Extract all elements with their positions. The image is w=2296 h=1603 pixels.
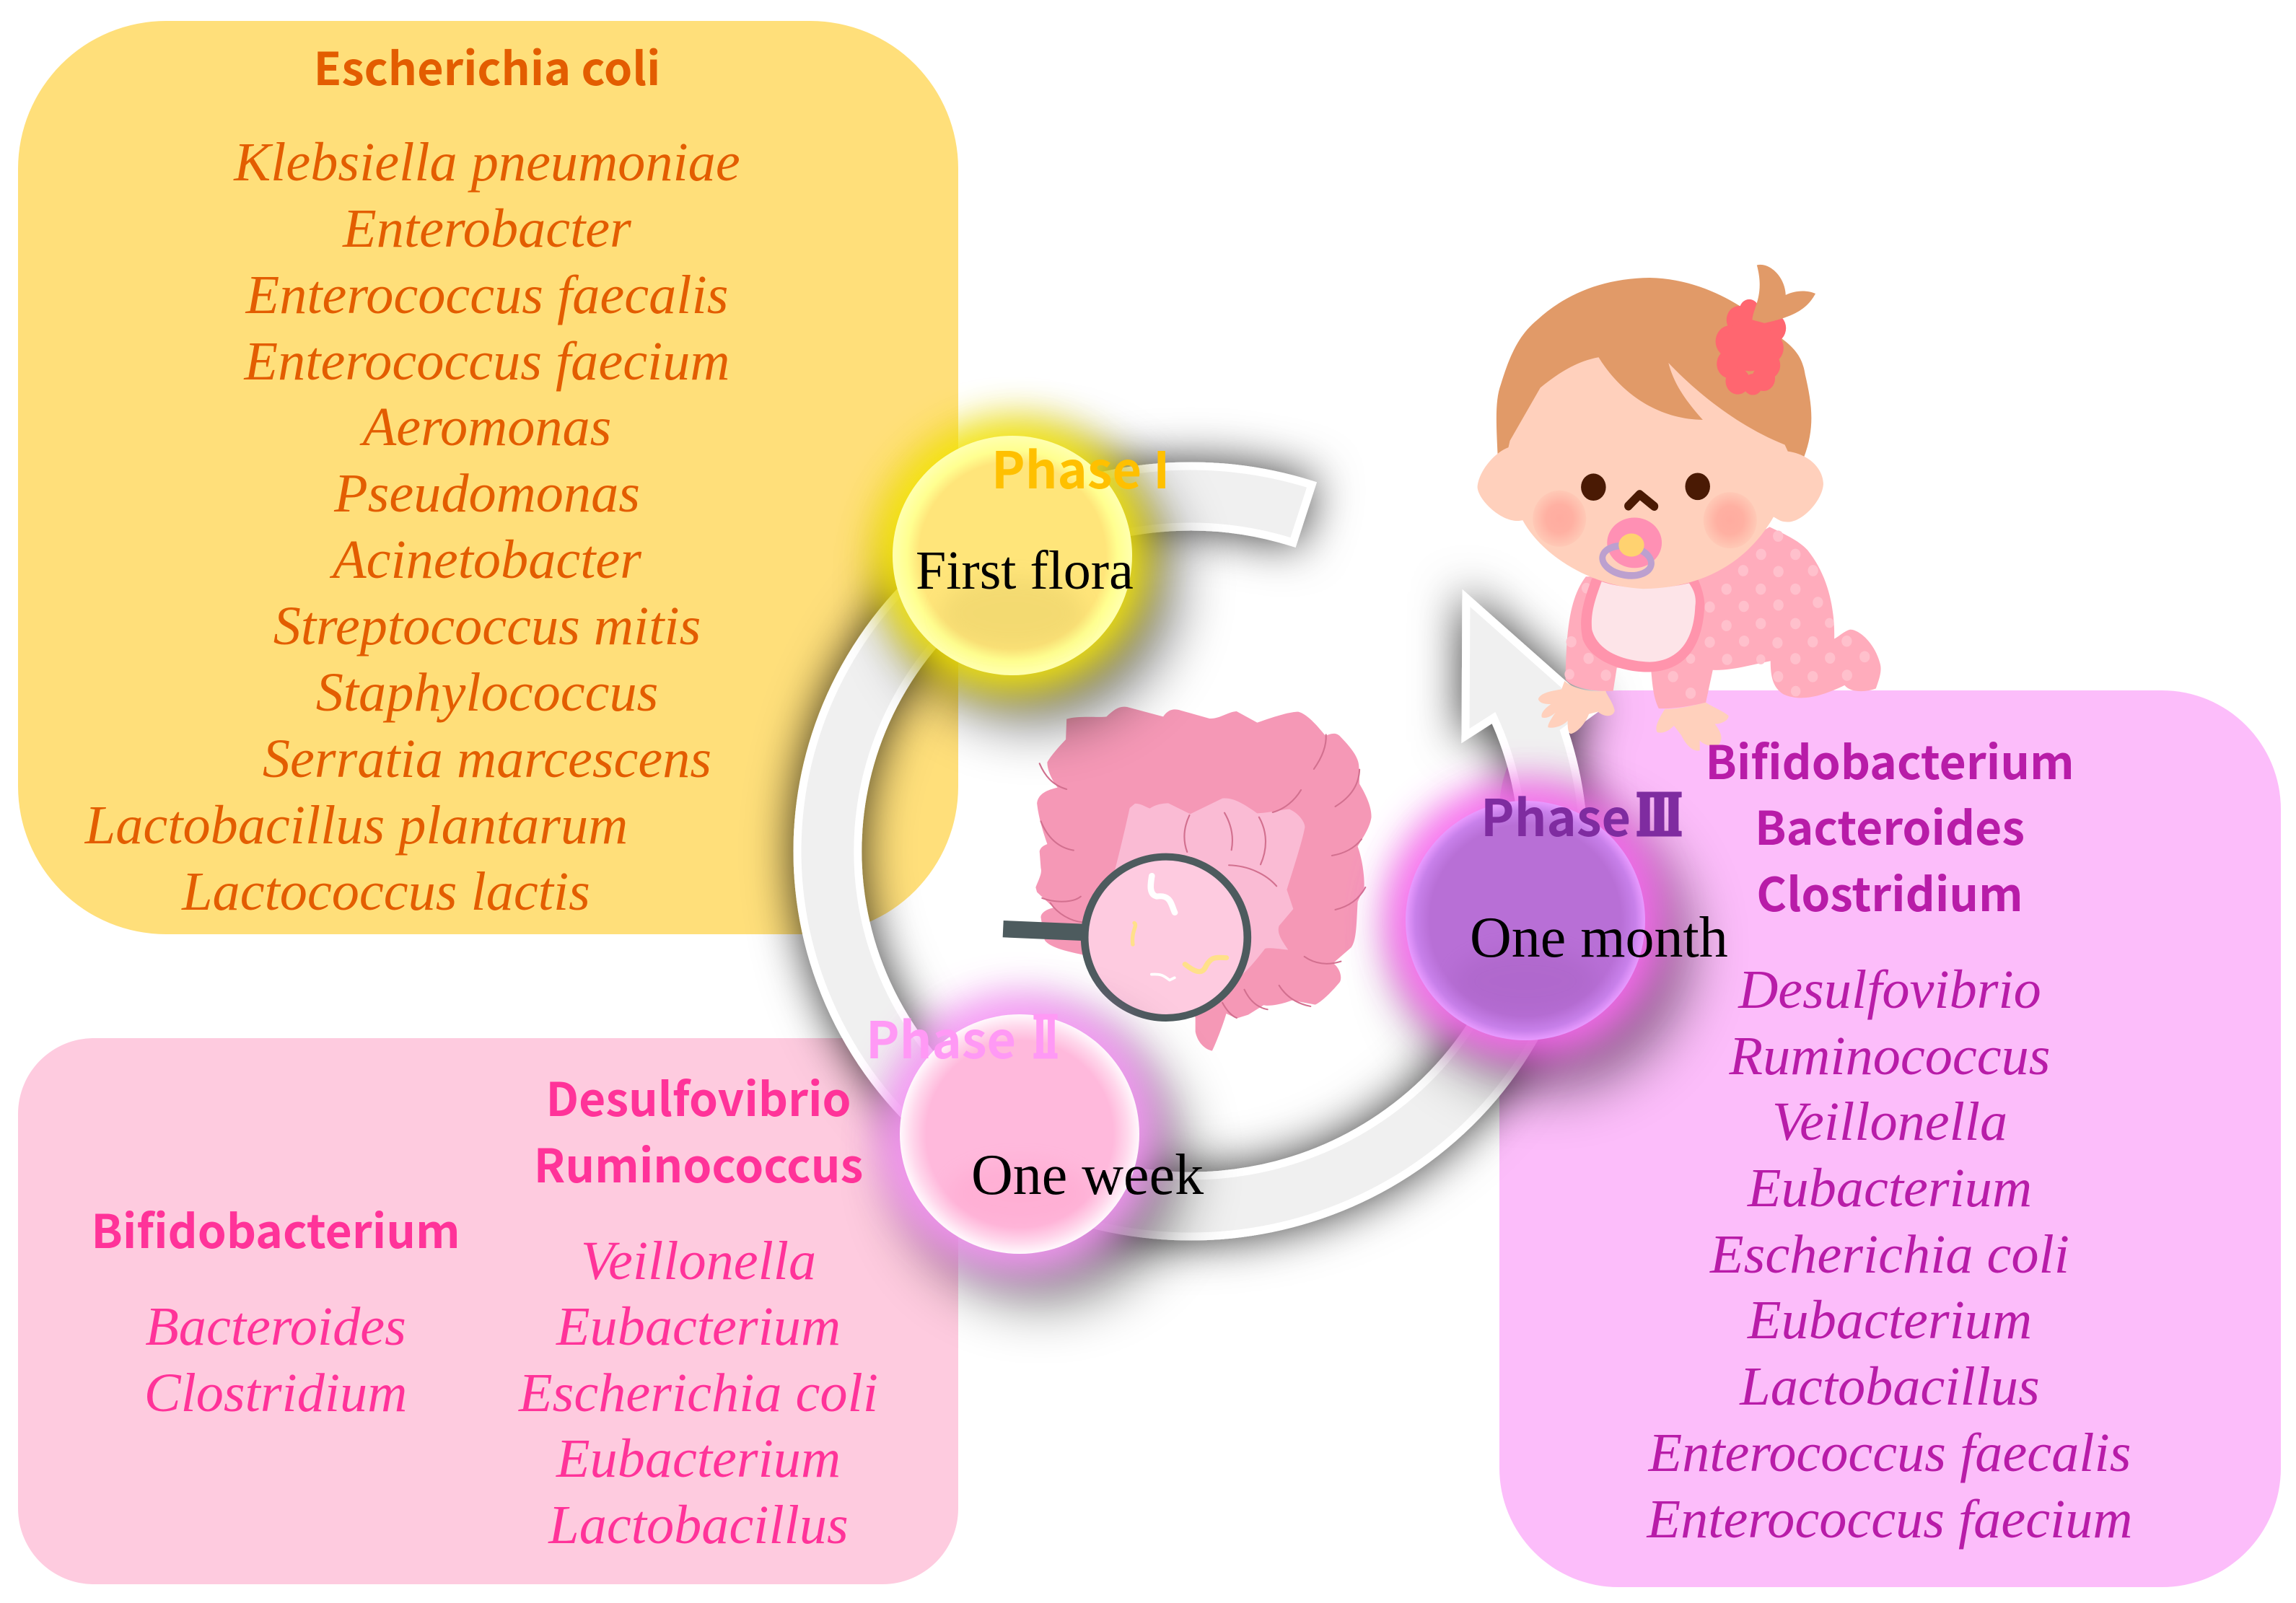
- text: magenta panel flora list: Enterococcus faecium: [1647, 1488, 2133, 1550]
- label: One month: One month: [1470, 906, 1728, 970]
- text: pink panel right flora list: Veillonella: [581, 1230, 816, 1291]
- label: Phase II: Ⅱ: [1030, 994, 1061, 1073]
- label: Phase I: Phase I: [991, 431, 1170, 504]
- text: yellow panel flora list: Enterococcus faecium: [244, 330, 730, 392]
- label: Phase III: [1481, 772, 1681, 851]
- circle: Phase I: [874, 417, 1175, 724]
- text: yellow panel flora list: Klebsiella pneumoniae: [233, 131, 740, 193]
- text: pink panel left flora list: Bacteroides: [145, 1296, 406, 1357]
- text: pink panel right flora list: Eubacterium: [556, 1296, 841, 1357]
- panel: yellow first flora background: [18, 21, 958, 934]
- text: pink panel right flora list: Eubacterium: [556, 1428, 841, 1489]
- text: pink panel left flora list: [91, 1195, 460, 1423]
- text: pink panel left flora list: Bifidobacterium: [91, 1195, 460, 1262]
- text: magenta panel flora list: Eubacterium: [1747, 1289, 2032, 1351]
- label: Phase III: Ⅲ: [1637, 772, 1681, 851]
- text: pink panel right flora list: Lactobacillus: [548, 1494, 849, 1555]
- label: Phase II: Phase: [866, 1001, 1016, 1073]
- panel: magenta one month background: [1499, 690, 2281, 1587]
- text: magenta panel flora list: Clostridium: [1756, 858, 2023, 925]
- text: yellow panel flora list: Enterobacter: [342, 198, 631, 259]
- text: pink panel right flora list: Escherichia coli: [518, 1362, 878, 1423]
- text: yellow panel flora list: Lactococcus lactis: [181, 861, 590, 922]
- text: magenta panel flora list: Bacteroides: [1755, 792, 2025, 858]
- text: yellow panel flora list: Pseudomonas: [333, 462, 640, 524]
- illustration: crawling baby: [1478, 265, 1881, 751]
- text: magenta panel flora list: Enterococcus faecalis: [1648, 1422, 2131, 1483]
- text: yellow panel flora list: Escherichia coli: [314, 33, 660, 99]
- text: yellow panel flora list: Serratia marcescens: [263, 728, 711, 789]
- text: yellow panel flora list: Enterococcus faecalis: [245, 264, 728, 325]
- text: magenta panel flora list: Desulfovibrio: [1738, 959, 2041, 1020]
- cycle arrow: [797, 466, 1593, 1237]
- text: pink panel right flora list: [518, 1063, 878, 1555]
- text: magenta panel flora list: [1647, 726, 2133, 1550]
- text: magenta panel flora list: Lactobacillus: [1739, 1356, 2040, 1417]
- panel: pink one week background: [18, 1038, 958, 1584]
- label: First flora: First flora: [916, 540, 1134, 601]
- text: yellow panel flora list: Streptococcus mitis: [273, 595, 701, 656]
- text: pink panel left flora list: Clostridium: [144, 1362, 407, 1423]
- label: Phase III: Phase: [1481, 778, 1631, 851]
- icon: intestine with magnifying glass: [1003, 707, 1372, 1051]
- text: magenta panel flora list: Ruminococcus: [1729, 1025, 2050, 1086]
- label: One week: One week: [971, 1143, 1204, 1207]
- circle: Phase III: [1384, 779, 1688, 1089]
- circle: Phase II: [878, 993, 1182, 1302]
- text: pink panel right flora list: Ruminococcus: [534, 1130, 863, 1196]
- text: magenta panel flora list: Bifidobacterium: [1705, 726, 2074, 793]
- text: yellow panel flora list: [84, 33, 740, 922]
- text: yellow panel flora list: Lactobacillus plantarum: [84, 794, 628, 856]
- text: yellow panel flora list: Aeromonas: [359, 396, 611, 457]
- text: magenta panel flora list: Eubacterium: [1747, 1157, 2032, 1218]
- text: yellow panel flora list: Staphylococcus: [316, 662, 658, 723]
- text: yellow panel flora list: Acinetobacter: [329, 529, 641, 590]
- text: magenta panel flora list: Veillonella: [1772, 1091, 2007, 1152]
- text: pink panel right flora list: Desulfovibrio: [545, 1063, 851, 1130]
- text: magenta panel flora list: Escherichia coli: [1709, 1224, 2069, 1285]
